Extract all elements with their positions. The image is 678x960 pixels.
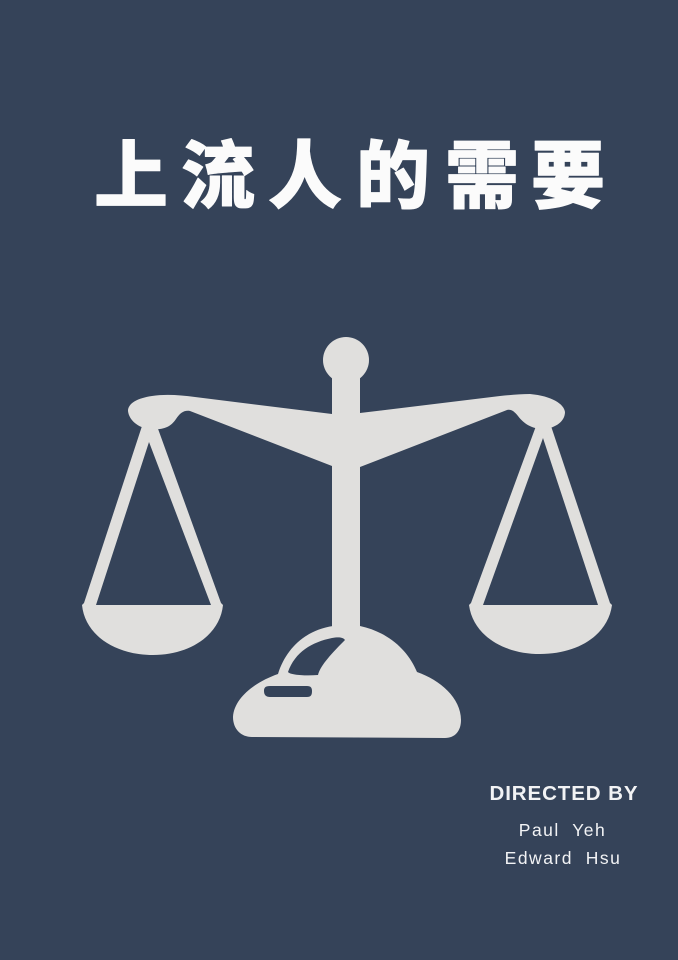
credit heading: DIRECTED BY bbox=[490, 782, 638, 805]
right pan and strings bbox=[469, 426, 612, 654]
post and finial bbox=[323, 337, 369, 635]
title: 上流人的需要 bbox=[94, 135, 605, 218]
name: Paul Yeh: Paul Yeh bbox=[519, 820, 606, 840]
balance beam bbox=[128, 394, 565, 471]
left pan and strings bbox=[82, 426, 223, 655]
icon: scales of justice bbox=[82, 337, 612, 738]
base bbox=[233, 626, 461, 738]
name: Edward Hsu: Edward Hsu bbox=[505, 848, 621, 868]
credits bbox=[490, 782, 638, 868]
